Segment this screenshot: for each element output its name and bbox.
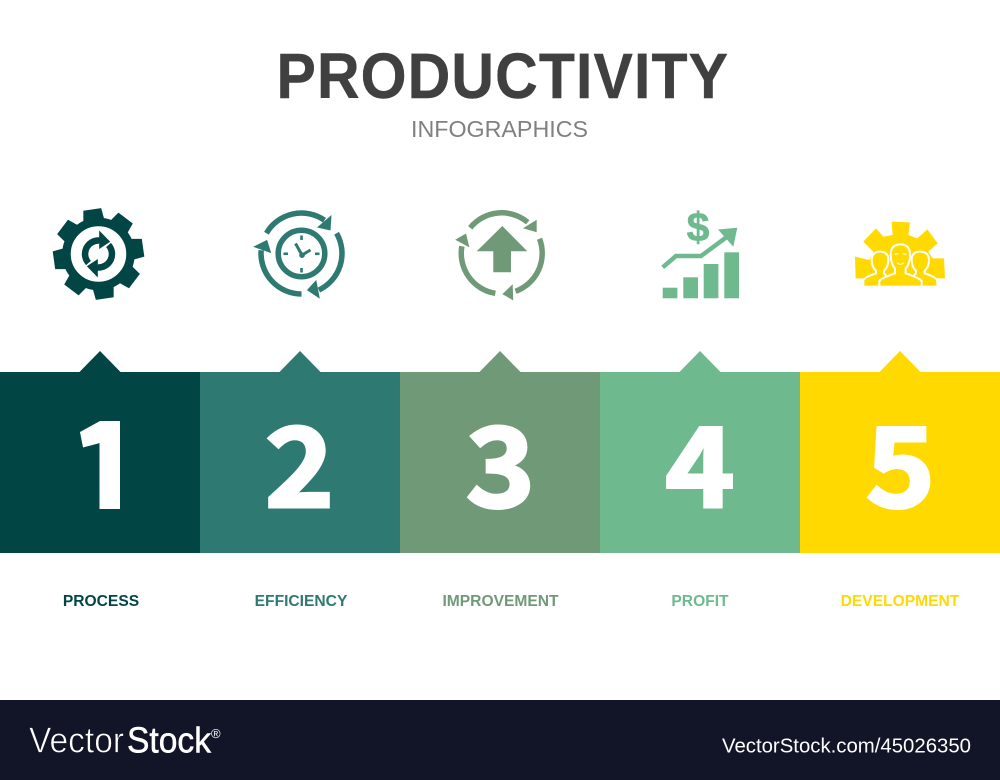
panel: step 2 — [200, 351, 400, 553]
label: development: DEVELOPMENT — [841, 593, 960, 610]
panel: step 4 — [600, 351, 800, 553]
footer logo — [29, 720, 221, 761]
panel: step 2: 2 — [265, 380, 334, 539]
subtitle: INFOGRAPHICS — [411, 116, 588, 142]
label: improvement: IMPROVEMENT — [442, 593, 559, 610]
footer logo: ® — [211, 726, 221, 741]
icon: team in front of gear — [855, 222, 945, 287]
panel: step 3: 3 — [466, 380, 535, 539]
icon: gear with refresh arrows — [52, 208, 145, 300]
footer logo: Vector — [29, 720, 124, 761]
panel: step 4: 4 — [665, 380, 735, 539]
footer bar — [0, 700, 1000, 780]
panel: step 1 — [0, 351, 200, 553]
title: PRODUCTIVITY — [276, 41, 728, 113]
label: efficiency: EFFICIENCY — [255, 593, 348, 610]
panel: step 1: 1 — [78, 379, 142, 539]
panel: step 5 — [800, 351, 1000, 553]
footer image id: VectorStock.com/45026350 — [722, 736, 971, 758]
icon: dollar and rising bar chart: $ — [687, 204, 710, 250]
label: process: PROCESS — [63, 593, 139, 610]
icon: clock with circular arrows — [251, 213, 354, 304]
panel: step 3 — [400, 351, 600, 553]
footer logo: Stock — [127, 720, 212, 761]
icon: up arrow with circular arrows — [449, 213, 553, 304]
icon: dollar and rising bar chart — [663, 204, 739, 298]
panel: step 5: 5 — [866, 380, 935, 539]
label: profit: PROFIT — [671, 593, 729, 610]
